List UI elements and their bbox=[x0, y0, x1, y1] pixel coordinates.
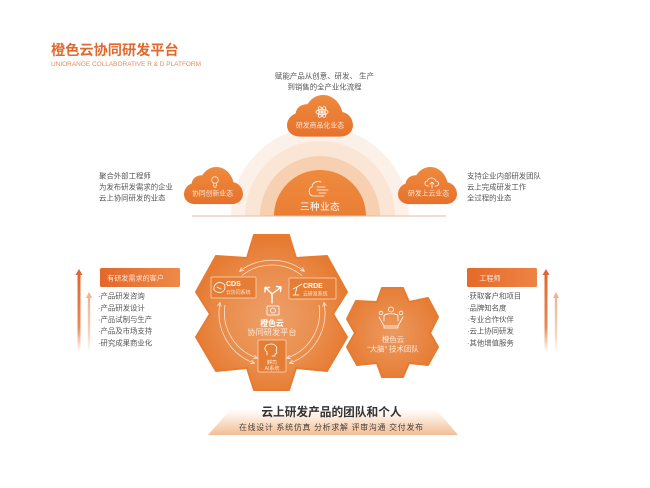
platform items: 在线设计 系统仿真 分析求解 评审沟通 交付发布 bbox=[239, 422, 423, 432]
core semicircle bbox=[274, 170, 366, 216]
text block: right description: 云上完成研发工作 bbox=[467, 182, 527, 192]
list: engineers: ·云上协同研发 bbox=[467, 326, 514, 336]
list: clients: ·产品研发咨询 bbox=[98, 292, 145, 300]
list: engineers: ·品牌知名度 bbox=[467, 304, 507, 312]
text block: right description: 支持企业内部研发团队 bbox=[467, 172, 542, 180]
gear body bbox=[196, 235, 347, 390]
arrow: dark right bbox=[542, 269, 550, 352]
gear label: “大脑” 技术团队 bbox=[367, 344, 419, 354]
text block: left description bbox=[99, 172, 173, 202]
list: clients bbox=[98, 292, 153, 348]
list: engineers: ·专业合作伙伴 bbox=[467, 315, 514, 324]
arrow: light left bbox=[86, 292, 92, 352]
baseline bbox=[192, 215, 446, 217]
cloud label: top: 研发商品化业态 bbox=[296, 120, 344, 130]
module: CRDE: CRDE bbox=[303, 283, 323, 290]
list: engineers: ·其他增值服务 bbox=[467, 338, 514, 348]
gear label: 协同研发平台 bbox=[247, 327, 297, 337]
text block: right description bbox=[467, 172, 542, 202]
title: 橙色云协同研发平台 bbox=[51, 42, 179, 59]
text block: top description bbox=[275, 72, 374, 92]
arrow: dark left bbox=[76, 269, 82, 352]
panel heading: engineers: 工程师 bbox=[479, 274, 501, 282]
module: CDS: 云协同系统 bbox=[226, 289, 251, 296]
cloud label: left: 协同创新业态 bbox=[192, 188, 233, 198]
small gear bbox=[347, 288, 438, 377]
panel heading: clients: 有研发需求的客户 bbox=[107, 274, 164, 282]
icon: team bbox=[379, 307, 403, 328]
text block: right description: 全过程的业态 bbox=[467, 194, 512, 202]
gear body bbox=[347, 288, 438, 377]
text block: left description: 为发布研发需求的企业 bbox=[99, 182, 173, 192]
main gear bbox=[196, 235, 347, 390]
module: CDS bbox=[211, 277, 256, 298]
icon: branching arrows bbox=[265, 286, 281, 303]
module: AI bbox=[258, 340, 286, 372]
platform heading: 云上研发产品的团队和个人 bbox=[261, 405, 402, 419]
module: AI: AI系统 bbox=[265, 365, 279, 372]
gear label: 橙色云 bbox=[260, 318, 284, 328]
arrow: light right bbox=[553, 292, 559, 352]
icon: cloud upload bbox=[425, 178, 439, 188]
gear label bbox=[247, 318, 297, 337]
gear label bbox=[367, 335, 419, 354]
semicircle rings bbox=[231, 132, 409, 216]
list: clients: ·产品及市场支持 bbox=[98, 326, 153, 336]
icon: light bulb bbox=[212, 177, 218, 188]
core label: 三种业态 bbox=[300, 201, 340, 213]
icon: core cloud bbox=[309, 181, 328, 196]
subtitle: UNIORANGE COLLABORATIVE R & D PLATFORM bbox=[51, 62, 201, 68]
text block: left description: 聚合外部工程师 bbox=[99, 172, 151, 180]
list: clients: ·产品研发设计 bbox=[98, 304, 145, 312]
circular arrows bbox=[219, 260, 325, 363]
text block: top description: 到销售的全产业化流程 bbox=[288, 82, 362, 92]
text block: top description: 赋能产品从创意、研发、 生产 bbox=[275, 72, 374, 80]
list: engineers bbox=[467, 292, 521, 348]
right column bbox=[467, 268, 559, 352]
bottom platform bbox=[208, 405, 458, 435]
cloud: top bbox=[287, 95, 353, 137]
module: CRDE bbox=[289, 278, 336, 299]
cloud label: right: 研发上云业态 bbox=[408, 188, 449, 198]
module: CRDE: 云研发系统 bbox=[303, 290, 328, 298]
gear label: 橙色云 bbox=[382, 335, 404, 344]
list: engineers: ·获取客户和项目 bbox=[467, 292, 521, 300]
icon: atom bbox=[316, 106, 328, 118]
left column bbox=[76, 268, 180, 352]
cloud: left bbox=[184, 167, 243, 204]
module: CDS: CDS bbox=[226, 281, 241, 288]
module: AI: 麒司 bbox=[267, 359, 277, 366]
text block: left description: 云上协同研发的业态 bbox=[99, 194, 166, 202]
list: clients: ·研究成果商业化 bbox=[98, 338, 153, 348]
cloud: right bbox=[398, 167, 457, 204]
list: clients: ·产品试制与生产 bbox=[98, 315, 152, 324]
icon: centre box bbox=[267, 306, 279, 315]
